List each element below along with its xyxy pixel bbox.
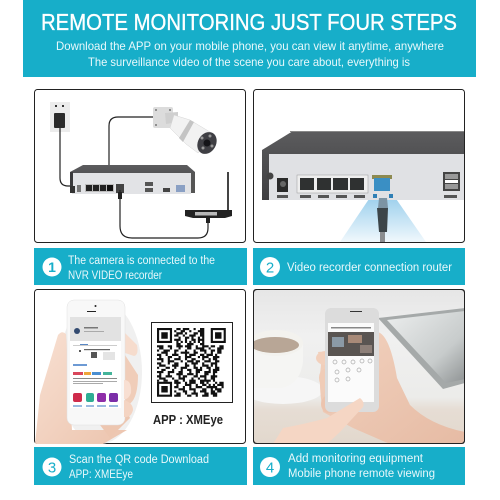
phone and hands	[273, 308, 465, 444]
caption bar 4: Mobile phone remote viewing	[288, 468, 435, 480]
caption bar 3: 3	[48, 460, 56, 476]
camera cable	[109, 117, 153, 182]
caption bar 3: Scan the QR code Download	[69, 454, 209, 466]
router cable	[120, 190, 208, 238]
caption bar 2: 2	[266, 260, 274, 276]
subtitle: The surveillance video of the scene you care about, everything is	[88, 55, 410, 69]
panel 2: router connection close-up	[254, 90, 465, 243]
caption bar 4	[253, 447, 465, 485]
QR code	[152, 322, 232, 402]
caption bar 2: Video recorder connection router	[287, 262, 452, 274]
fingers	[124, 400, 133, 417]
icon: ethernet plug	[377, 198, 388, 243]
title: REMOTE MONITORING JUST FOUR STEPS	[41, 9, 457, 35]
header banner	[23, 0, 476, 77]
tablet	[378, 308, 465, 389]
panel 1: camera to NVR wiring diagram	[34, 90, 246, 242]
panel 3: scan QR code	[34, 290, 246, 444]
caption bar 2	[253, 248, 465, 285]
phone with app page	[67, 300, 125, 425]
icon: wall socket and adapter	[50, 102, 74, 186]
caption bar 1	[34, 248, 247, 285]
caption bar 4: Add monitoring equipment	[288, 453, 424, 465]
icon: router	[185, 172, 232, 218]
NVR close-up	[262, 131, 465, 200]
caption bar 1: The camera is connected to the	[68, 255, 215, 267]
subtitle	[56, 39, 444, 69]
subtitle: Download the APP on your mobile phone, you can view it anytime, anywhere	[56, 39, 444, 53]
phone screen with video	[325, 308, 379, 412]
icon: bullet camera	[153, 107, 221, 157]
caption bar 1: 1	[48, 259, 56, 275]
caption bar 3	[34, 447, 247, 485]
coffee cup	[254, 337, 320, 404]
caption bar 1: NVR VIDEO recorder	[68, 270, 162, 282]
caption bar 3: APP: XMEEye	[69, 469, 133, 481]
panel 4: remote viewing photo	[243, 289, 465, 444]
light cone	[340, 200, 426, 242]
icon: NVR recorder	[70, 165, 195, 194]
pointing finger hand	[273, 398, 364, 444]
hand holding phone	[35, 300, 142, 444]
QR label: APP : XMEye	[153, 412, 223, 427]
caption bar 4: 4	[266, 460, 274, 476]
